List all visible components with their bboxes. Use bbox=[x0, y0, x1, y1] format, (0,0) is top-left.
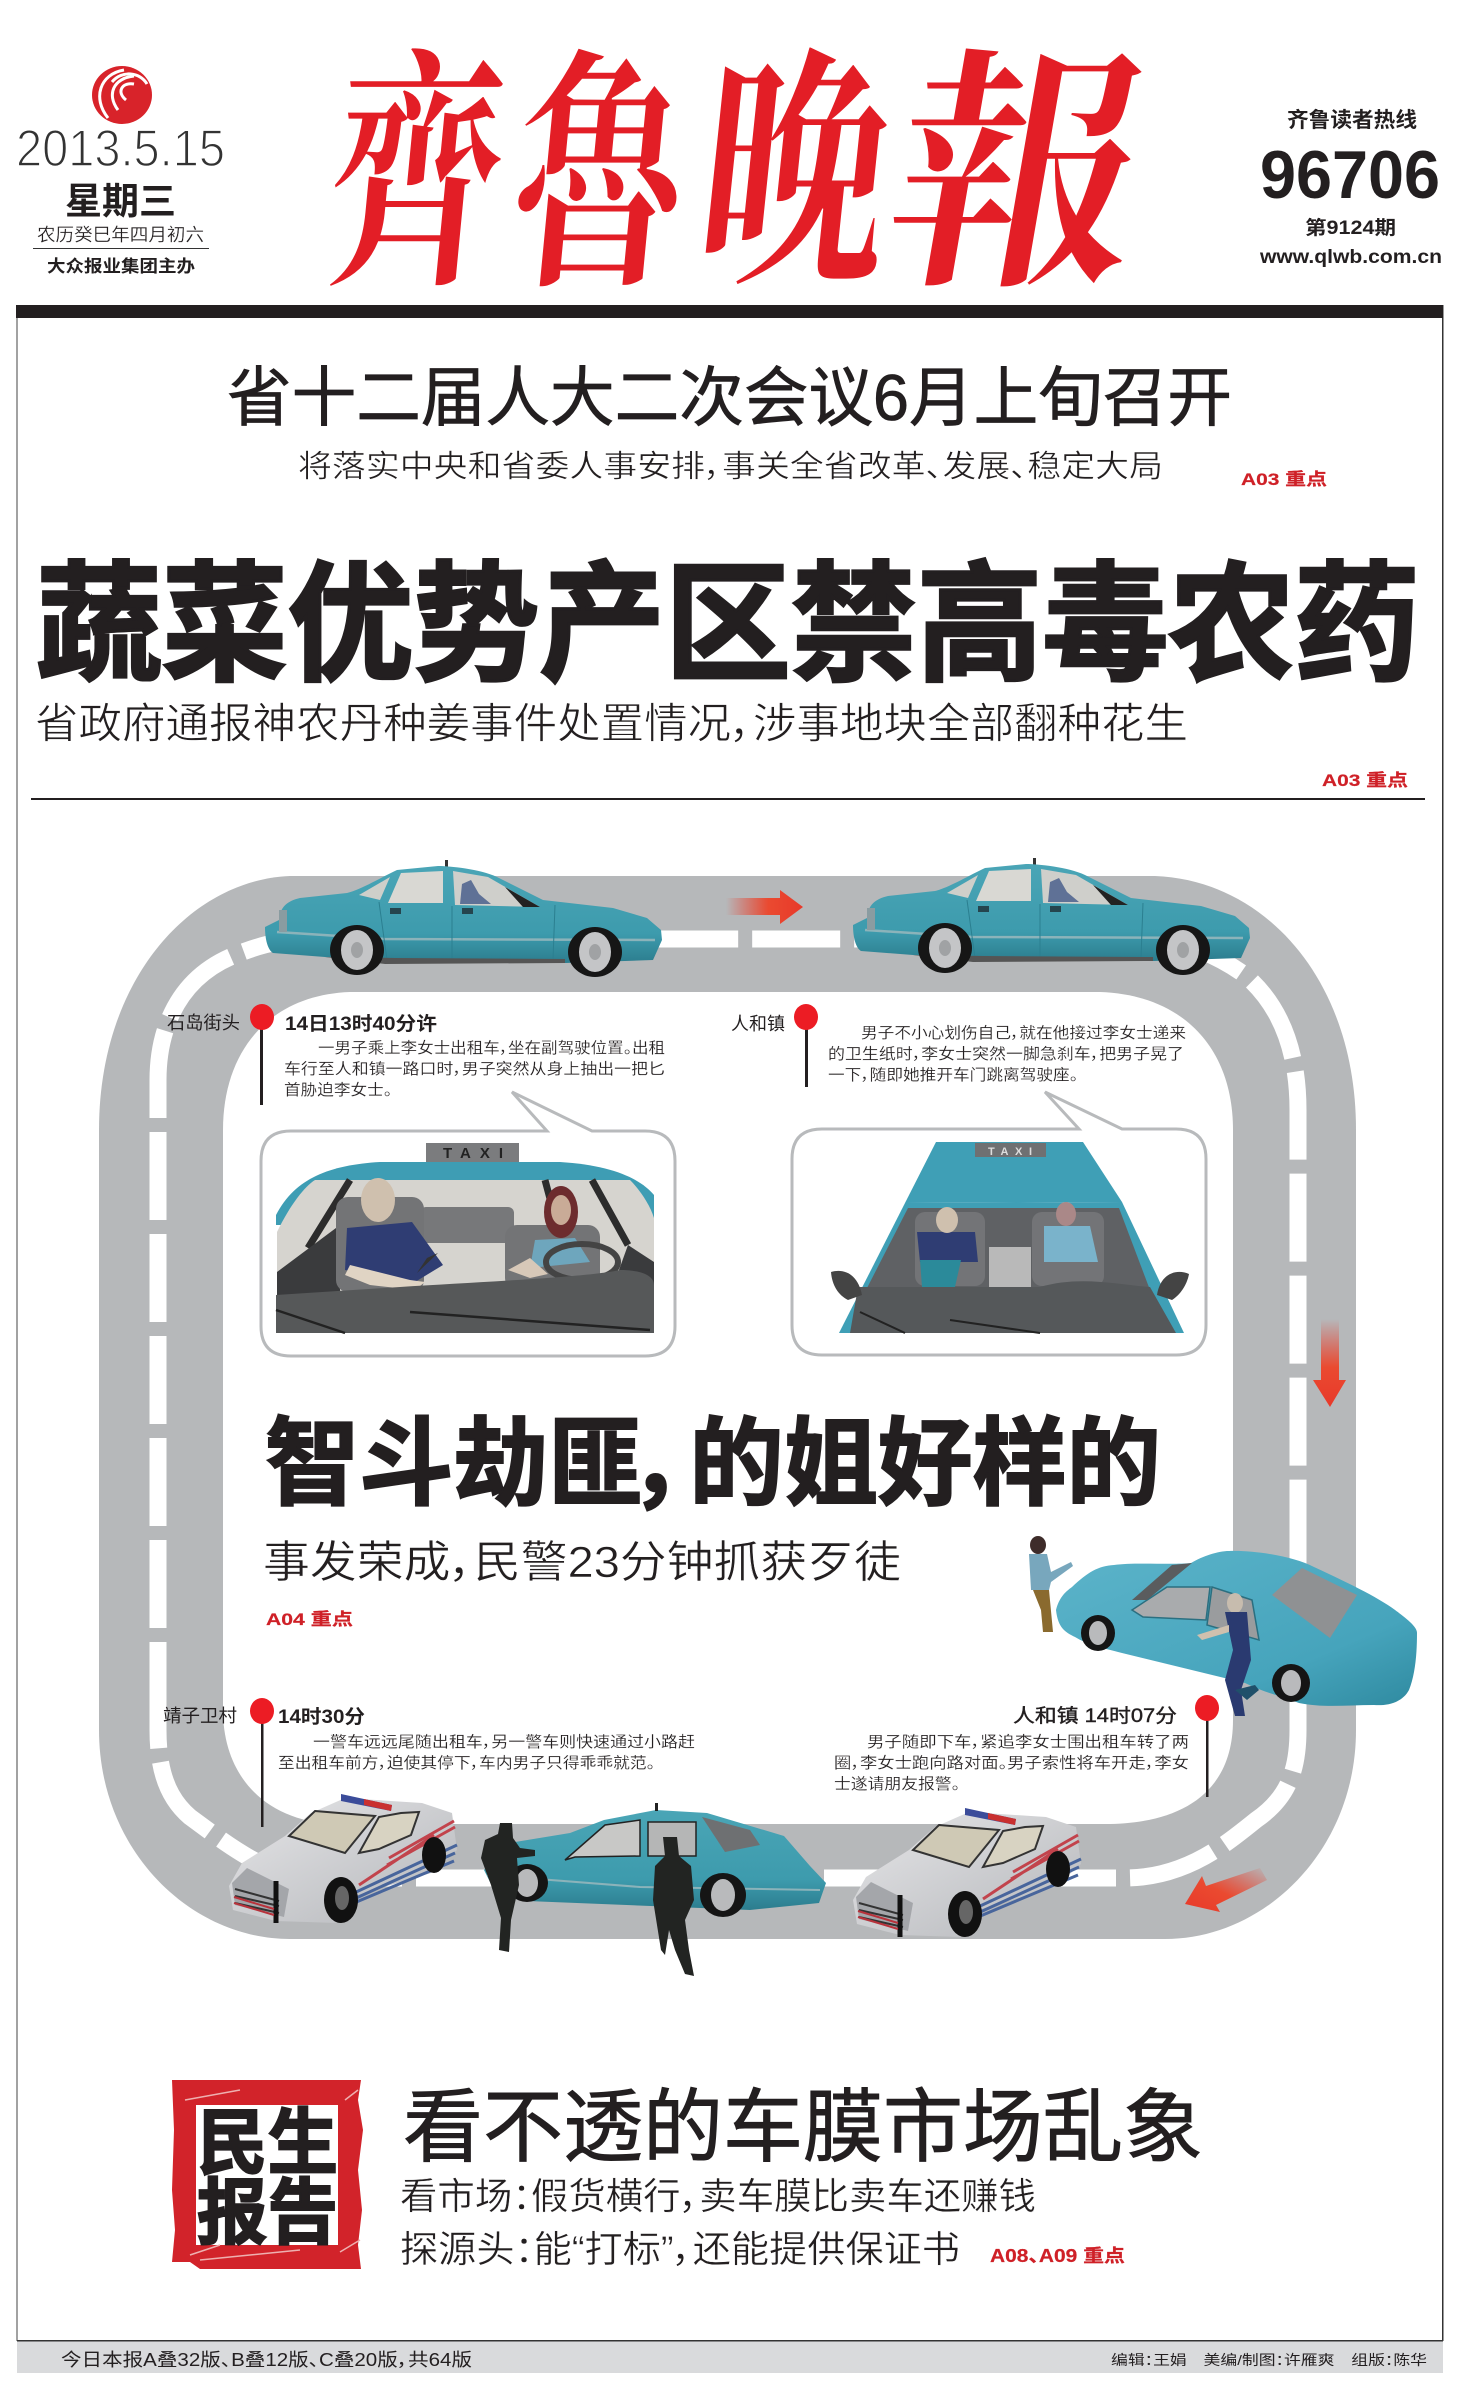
car: police car right bbox=[853, 1808, 1081, 1937]
car: taxi at start bbox=[265, 860, 662, 977]
step 3: Jingzi village bbox=[163, 1698, 696, 1827]
description: 至出租车前方，迫使其停下，车内男子只得乖乖就范。 bbox=[278, 1754, 655, 1772]
car: taxi moving right bbox=[853, 858, 1250, 975]
arrow: top, pointing right bbox=[726, 890, 803, 924]
step 4: Renhe town 14:07 bbox=[834, 1695, 1219, 1797]
place label: 靖子卫村 bbox=[163, 1706, 237, 1726]
subhead 1: 看市场：假货横行，卖车膜比卖车还赚钱 bbox=[400, 2176, 1036, 2217]
map pin bbox=[794, 1004, 818, 1087]
step 2: Renhe town bbox=[731, 1004, 1186, 1087]
description: 车行至人和镇一路口时，男子突然从身上抽出一把匕 bbox=[284, 1060, 665, 1078]
taxi interior windshield view bbox=[831, 1142, 1189, 1333]
subhead: 将落实中央和省委人事安排，事关全省改革、发展、稳定大局 bbox=[298, 449, 1163, 484]
logo: people's livelihood report stamp: 民生 bbox=[197, 2104, 338, 2184]
description bbox=[834, 1732, 1189, 1793]
lead headline: vegetables pesticide ban: 蔬菜优势产区禁高毒农药 bbox=[36, 552, 1420, 698]
robber beside car bbox=[1197, 1593, 1259, 1716]
masthead right block: hotline: www.qlwb.com.cn bbox=[1259, 247, 1442, 268]
description: 一男子乘上李女士出租车，坐在副驾驶位置。出租 bbox=[318, 1038, 665, 1057]
masthead right block: hotline bbox=[1259, 108, 1442, 268]
feature subhead: 事发荣成，民警23分钟抓获歹徒 bbox=[263, 1538, 901, 1587]
place label: 人和镇 bbox=[731, 1014, 785, 1034]
description: 圈，李女士跑向路对面。男子索性将车开走，李女 bbox=[834, 1753, 1189, 1772]
footer bar bbox=[17, 2340, 1443, 2373]
editor credits: 编辑：王娟 美编/制图：许雁爽 组版：陈华 bbox=[1111, 2352, 1427, 2368]
car: stopped taxi with two officers bbox=[481, 1803, 826, 1976]
headline: provincial congress: 省十二届人大二次会议6月上旬召开 bbox=[227, 361, 1232, 434]
description bbox=[828, 1023, 1186, 1084]
logo: people's livelihood report stamp: 报告 bbox=[197, 2174, 338, 2254]
description bbox=[278, 1733, 696, 1772]
officer right bbox=[653, 1837, 694, 1976]
masthead right block: hotline: 第9124期 bbox=[1305, 217, 1396, 239]
weekday: 星期三 bbox=[65, 181, 176, 222]
headline: window film market bbox=[400, 2083, 1203, 2270]
time: 14时30分 bbox=[278, 1706, 365, 1728]
description: 一下，随即她推开车门跳离驾驶座。 bbox=[828, 1066, 1078, 1084]
masthead left block: logo and date bbox=[16, 66, 225, 276]
lunar date: 农历癸巳年四月初六 bbox=[37, 225, 204, 245]
place label: 石岛街头 bbox=[167, 1013, 240, 1033]
description: 一警车远远尾随出租车，另一警车则快速通过小路赶 bbox=[313, 1733, 696, 1751]
logo: people's livelihood report stamp bbox=[172, 2080, 363, 2269]
masthead title bbox=[315, 0, 1176, 337]
officer left bbox=[481, 1823, 535, 1952]
page reference: A04 重点 bbox=[266, 1610, 353, 1629]
taxi interior windshield view: TAXI bbox=[988, 1146, 1032, 1158]
time: 14日13时40分许 bbox=[285, 1013, 437, 1035]
feature headline: taxi driver fights robber bbox=[263, 1411, 1161, 1629]
step 1: Shidao street bbox=[167, 1004, 665, 1105]
edition info: 今日本报A叠32版、B叠12版、C叠20版，共64版 bbox=[61, 2350, 472, 2370]
car: police car left bbox=[229, 1794, 457, 1923]
lead headline: vegetables pesticide ban bbox=[35, 552, 1420, 790]
taxi interior front view bbox=[276, 1143, 654, 1333]
description: 男子随即下车，紧追李女士围出租车转了两 bbox=[867, 1732, 1189, 1751]
lead subhead: 省政府通报神农丹种姜事件处置情况，涉事地块全部翻种花生 bbox=[35, 700, 1188, 747]
car: taxi stopped with man and woman bbox=[1029, 1536, 1417, 1716]
place and time: 人和镇 14时07分 bbox=[1013, 1705, 1177, 1727]
map pin bbox=[250, 1698, 274, 1827]
icon: newspaper swirl logo bbox=[92, 66, 152, 124]
publisher: 大众报业集团主办 bbox=[47, 256, 195, 276]
headline: window film market: 看不透的车膜市场乱象 bbox=[403, 2083, 1203, 2172]
subhead 2: 探源头：能“打标”，还能提供保证书 bbox=[400, 2229, 960, 2270]
arrow: bottom, pointing left-down bbox=[1185, 1868, 1267, 1912]
map pin bbox=[1195, 1695, 1219, 1797]
speech bubble 2: driver brakes hard bbox=[792, 1092, 1206, 1355]
speech bubble 1: robber draws knife bbox=[261, 1092, 675, 1356]
page reference: A03 重点 bbox=[1241, 470, 1327, 489]
description bbox=[284, 1038, 665, 1099]
page reference: A03 重点 bbox=[1322, 771, 1408, 790]
arrow: right, pointing down bbox=[1313, 1319, 1346, 1407]
page reference: A08、A09 重点 bbox=[990, 2246, 1125, 2266]
feature headline: taxi driver fights robber: 智斗劫匪，的姐好样的 bbox=[265, 1411, 1161, 1518]
masthead rule bbox=[16, 305, 1443, 318]
date: 2013.5.15 bbox=[16, 120, 225, 178]
masthead right block: hotline: 齐鲁读者热线 bbox=[1287, 108, 1417, 132]
hotline number: 96706 bbox=[1260, 137, 1440, 213]
description: 士遂请朋友报警。 bbox=[834, 1775, 960, 1793]
description: 的卫生纸时，李女士突然一脚急刹车，把男子晃了 bbox=[828, 1044, 1184, 1063]
description: 男子不小心划伤自己，就在他接过李女士递来 bbox=[861, 1023, 1186, 1042]
woman running bbox=[1029, 1536, 1073, 1632]
description: 首胁迫李女士。 bbox=[284, 1080, 392, 1099]
headline: provincial congress bbox=[227, 361, 1327, 489]
taxi interior front view: TAXI bbox=[443, 1145, 503, 1162]
road loop bbox=[99, 876, 1356, 1939]
map pin bbox=[250, 1004, 274, 1105]
